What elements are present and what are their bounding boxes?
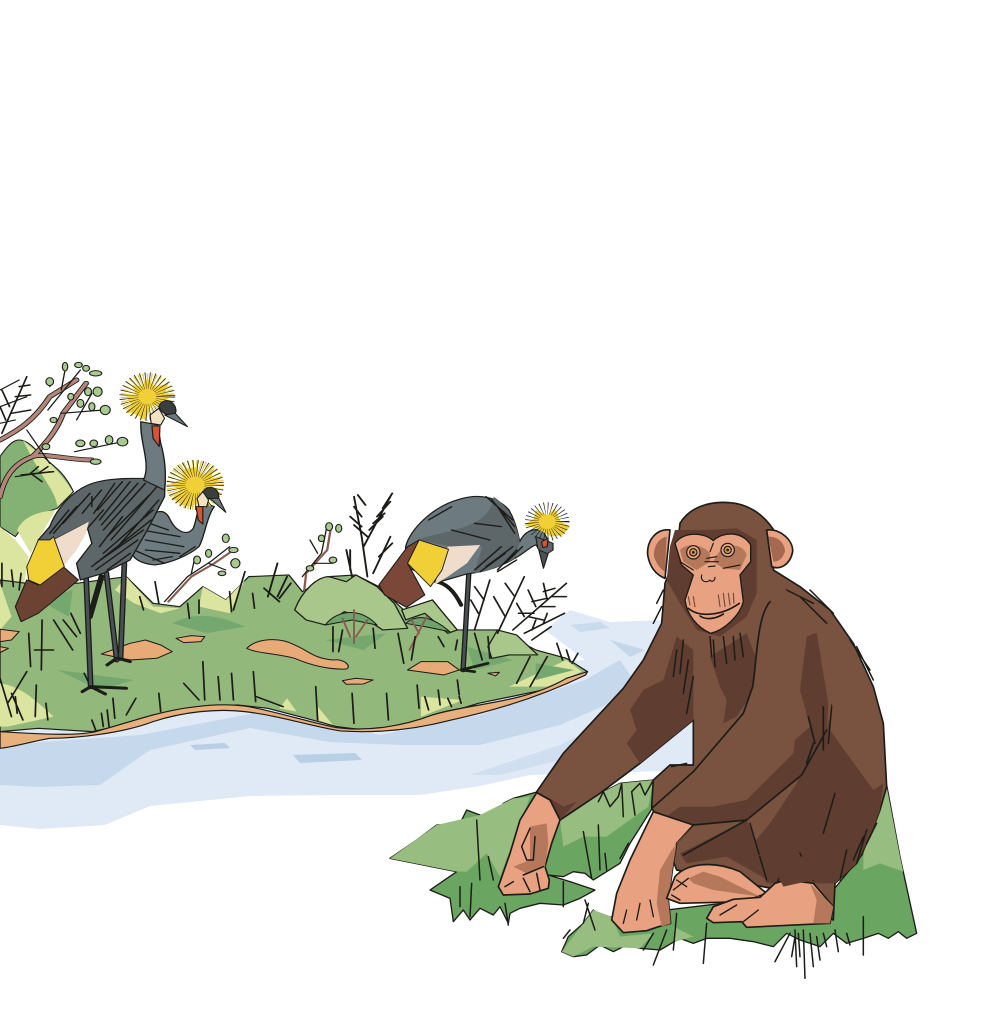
crane 3 dark back [417,497,520,573]
crane 1 beak [165,413,188,427]
right ear [767,530,793,568]
foot toes [720,905,758,922]
far hand shadow [513,823,548,873]
crane 2 head [203,487,219,500]
crane 1 neck [141,422,165,490]
near arm shading [662,633,828,825]
grass patch: beneath chimp [562,785,917,957]
crane 2 (rear) [121,467,226,658]
crane 1 body [38,477,165,580]
chimp dark fur shading [537,633,883,883]
crane 1 feet [82,658,130,694]
crane 3 tail brown [379,540,425,607]
crane 3 crest [524,508,570,537]
muzzle stubble [688,593,734,607]
crane 1 wattle [152,426,160,447]
crane 1 crest [126,378,174,420]
ear inner shading [654,537,785,572]
water [0,610,700,829]
leg shadow [688,872,760,897]
crane 2 feather lines [134,523,195,563]
crane 2 far leg [121,563,124,658]
crane 1 feather lines [50,482,159,570]
mouth [688,603,739,619]
left fern [0,377,54,482]
chimpanzee and its grass [390,502,917,978]
island grass body [0,575,587,732]
crane 2 wattle [196,507,203,524]
near hand shadow [657,825,693,927]
crane 3 beak [539,550,548,568]
crane 2 beak [210,498,226,512]
nose and wrinkles [680,543,740,582]
tree branches fill [0,380,92,497]
crane 1 cheek [150,408,165,425]
crane 3 leg fill [463,573,469,670]
eyes [687,543,734,559]
center plant with buds [165,523,342,602]
crane 1 legs fill [86,573,117,687]
crane 3 cream patch [434,545,480,585]
central bush [295,575,408,630]
crane 1 head [159,401,176,415]
face [675,534,751,633]
small acacia shrubs [325,612,450,632]
sand patches [0,629,499,684]
chimp near arm [652,605,832,825]
tree twigs [0,370,122,477]
foot [707,880,833,927]
crane 3 folded leg [436,582,461,605]
foot shadow [810,883,833,923]
grass tufts [0,563,578,730]
crane 1 (front) [15,378,188,694]
far hand [498,793,560,895]
crane 2 near leg shading [121,563,124,658]
sand shore [0,672,587,748]
dark grass patches [38,590,574,690]
right fern [471,577,566,640]
crane 1 tail brown [15,567,78,622]
tree leaves [42,362,128,464]
chimp body and far arm [537,502,887,920]
near arm outline and fur lines [652,602,827,855]
face fringe dark [667,528,757,637]
face shading [680,545,747,570]
crane 3 head [536,537,553,555]
crane 1 yellow patch [27,537,64,585]
shrub branches [343,610,427,650]
left ear [648,530,670,578]
mound highlights [0,440,73,590]
right bush [402,600,538,658]
crane 3 foot [461,663,488,672]
chimp body lines [653,590,877,890]
crane 2 cheek [197,492,209,507]
grass patch: left of chimp [390,780,653,923]
near hand [612,812,693,933]
crane 2 body and neck [129,502,214,565]
crane 3 wattle [542,538,548,548]
island with cranes [0,362,587,748]
near hand fingers [623,900,653,923]
light grass patches [0,577,582,727]
tree branches [0,380,92,497]
crane 3 feather lines [429,497,522,572]
toes near hand [672,878,688,900]
crane 1 legs [86,573,117,687]
crane 1 cream patch [54,522,89,567]
crane 2 crest [170,467,222,507]
grass patch left light shading [390,780,653,877]
bent leg [667,865,767,903]
center tall fern [264,493,392,602]
back-left green mound [0,440,73,537]
crane 3 (right, bending) [379,496,570,672]
crane 3 standing leg [463,573,469,670]
grass light shading [562,787,903,957]
crane 3 yellow patch [408,540,449,587]
grass blades [460,780,863,978]
fur fringe over leg [743,853,833,887]
far hand fingers [505,828,543,892]
crane 3 body [406,496,553,582]
